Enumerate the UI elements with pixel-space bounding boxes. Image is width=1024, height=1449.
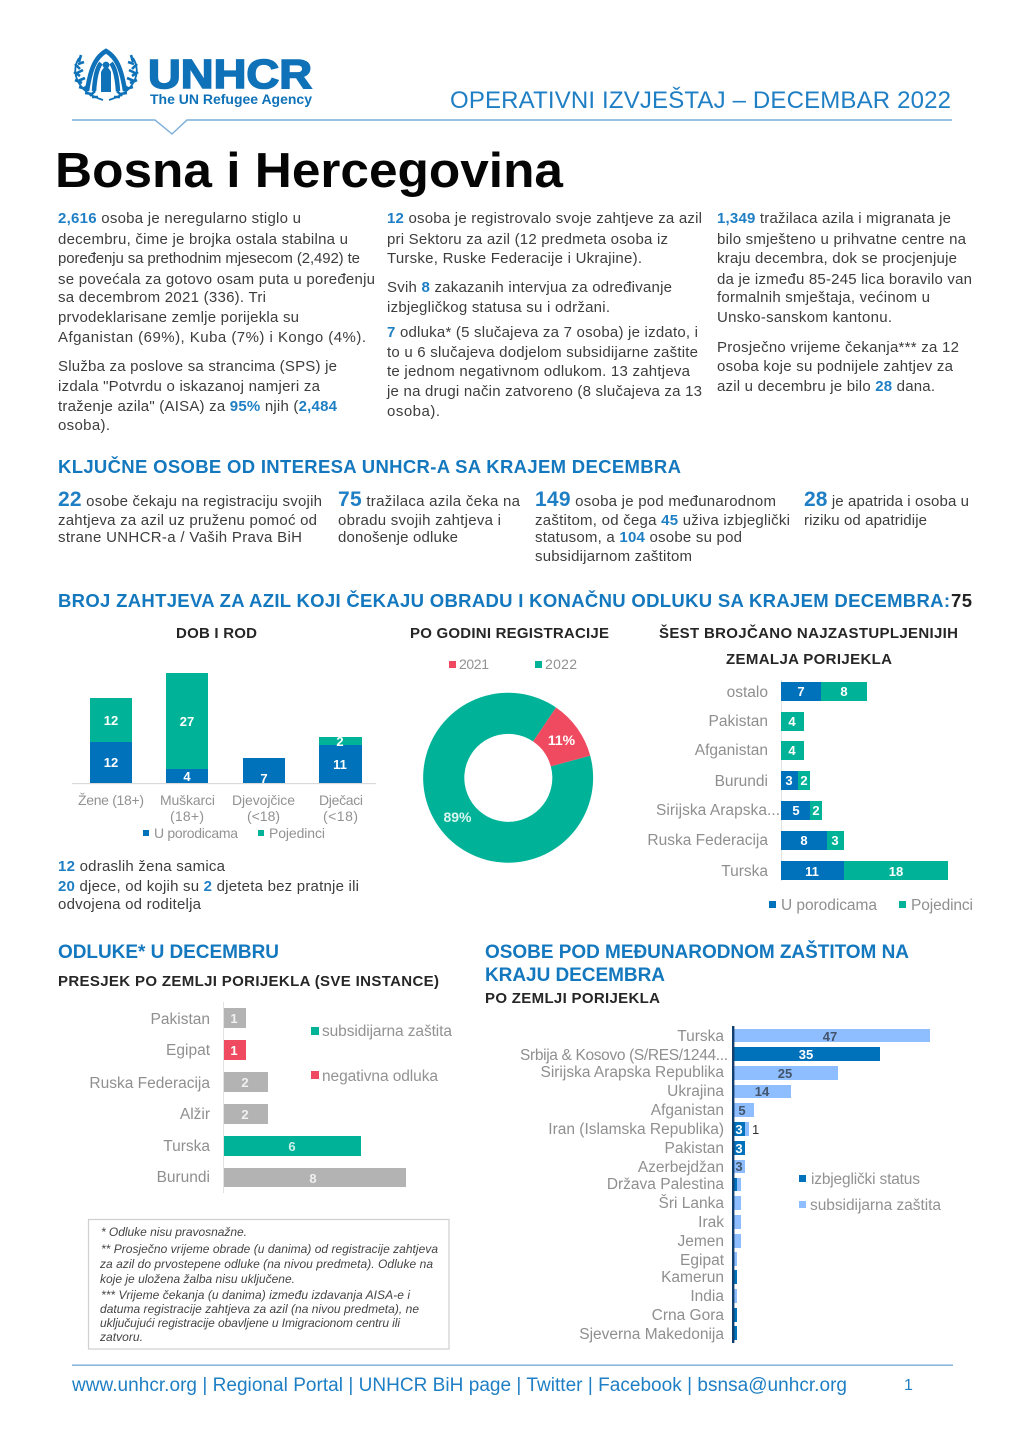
chart heading: PO GODINI REGISTRACIJE — [410, 625, 609, 642]
text block: women and children: odvojena od roditelja — [58, 896, 202, 913]
heading: key persons: KLJUČNE OSOBE OD INTERESA UNHCR-A SA KRAJEM DECEMBRA — [58, 456, 681, 477]
logo wordmark: UNHCR — [148, 51, 312, 97]
key figure: 75 — [338, 488, 521, 546]
chart: top six countries of origin: 3 — [785, 773, 793, 788]
logo tagline: The UN Refugee Agency — [150, 92, 313, 107]
chart: protection by country of origin: Turska — [677, 1028, 724, 1045]
legend: 2021 — [459, 656, 489, 672]
chart: by year of registration — [410, 625, 609, 863]
chart: protection by country of origin: Iran (Islamska Republika) — [548, 1121, 724, 1138]
chart: protection by country of origin: 3 — [735, 1141, 743, 1156]
chart: age and gender: 12 — [104, 713, 118, 728]
text block: women and children — [58, 858, 359, 913]
chart: age and gender: (<18) — [323, 808, 358, 824]
chart: decisions by country of origin: Turska — [163, 1138, 210, 1155]
heading: decisions: ODLUKE* U DECEMBRU — [58, 942, 279, 963]
text block: women and children: 20 djece, od kojih su 2 djeteta bez pratnje ili — [58, 878, 359, 895]
key figure: 149: 149 osoba je pod međunarodnom — [535, 488, 776, 511]
key figure: 22: zahtjeva za azil uz pruženu pomoć od — [58, 512, 317, 529]
key figure: 28 — [804, 488, 969, 529]
chart: protection by country of origin: 3 — [735, 1159, 743, 1174]
text block: women and children: 12 odraslih žena samica — [58, 858, 226, 875]
chart: top six countries of origin: Burundi — [715, 773, 768, 790]
chart: protection by country of origin: 14 — [755, 1084, 770, 1099]
chart: protection by country of origin: 35 — [799, 1047, 813, 1062]
legend: subsidijarna zaštita — [322, 1023, 452, 1040]
chart: protection by country of origin: Pakistan — [665, 1140, 724, 1157]
legend: Pojedinci — [269, 825, 325, 841]
chart: age and gender: 12 — [104, 755, 118, 770]
notes box: za azil do prvostepene odluke (na nivou predmeta). Odluke na — [99, 1257, 433, 1271]
chart: protection by country of origin: Crna Gora — [652, 1307, 724, 1324]
key figure: 75: 75 tražilaca azila čeka na — [338, 488, 521, 511]
icon: UNHCR emblem — [74, 51, 138, 100]
heading: persons under international protection — [485, 941, 909, 986]
chart: protection by country of origin: Srbija & Kosovo (S/RES/1244... — [520, 1047, 728, 1064]
notes box: uključujući registracije obavljene u Imigracionom centru ili — [100, 1316, 400, 1330]
chart: age and gender: (<18) — [247, 808, 280, 824]
key figure: 22: strane UNHCR-a / Vaših Prava BiH — [58, 529, 302, 546]
text block: accommodation: bilo smješteno u prihvatne centre na — [717, 231, 967, 248]
chart: top six countries of origin: 7 — [797, 684, 805, 699]
key figure: 22: 22 osobe čekaju na registraciju svojih — [58, 488, 322, 511]
legend — [799, 1171, 941, 1214]
chart: top six countries of origin: 8 — [840, 684, 848, 699]
heading: pending applications: BROJ ZAHTJEVA ZA AZIL KOJI ČEKAJU OBRADU I KONAČNU ODLUKU SA KRAJEM DECEMBRA: — [58, 590, 950, 611]
text block: registration: osoba). — [387, 403, 440, 420]
chart: top six countries of origin: 2 — [812, 803, 820, 818]
text block: registration: 12 osoba je registrovalo svoje zahtjeve za azil — [387, 210, 702, 227]
chart: age and gender: 4 — [183, 769, 191, 784]
text block: registration: to u 6 slučajeva dodjelom subsidijarne zaštite — [387, 344, 698, 361]
key figure: 149: statusom, a 104 osobe su pod — [535, 529, 742, 546]
text block: accommodation: da je između 85-245 lica boravilo van — [717, 271, 972, 288]
chart: decisions by country of origin: Ruska Federacija — [89, 1075, 210, 1092]
chart: decisions by country of origin: Pakistan — [151, 1011, 210, 1028]
text block: arrivals — [58, 210, 375, 434]
logo: UNHCR — [74, 51, 313, 107]
key figure: 28: riziku od apatridije — [804, 512, 927, 529]
chart: protection by country of origin: 1 — [752, 1122, 759, 1137]
text block: arrivals: traženje azila" (AISA) za 95% njih (2,484 — [58, 398, 338, 415]
chart: decisions by country of origin: 1 — [230, 1043, 238, 1058]
chart: age and gender: Muškarci — [160, 792, 215, 808]
page number: 1 — [904, 1377, 913, 1394]
chart: decisions by country of origin: Egipat — [166, 1042, 211, 1059]
legend — [769, 897, 973, 914]
chart: age and gender — [72, 625, 376, 841]
footer links: www.unhcr.org | Regional Portal | UNHCR BiH page | Twitter | Facebook | bsnsa@unhcr.org — [71, 1375, 847, 1396]
key figure: 149 — [535, 488, 790, 565]
chart: top six countries of origin: 4 — [788, 743, 796, 758]
key figure: 75: donošenje odluke — [338, 529, 458, 546]
chart: decisions by country of origin: Alžir — [180, 1106, 210, 1123]
text block: registration: te jednom negativnom odlukom. 13 zahtjeva — [387, 363, 691, 380]
legend: U porodicama — [781, 897, 877, 914]
key figure: 149: subsidijarnom zaštitom — [535, 548, 692, 565]
chart: protection by country of origin: 5 — [738, 1103, 746, 1118]
text block: arrivals: Afganistan (69%), Kuba (7%) i Kongo (4%). — [58, 329, 366, 346]
chart: top six countries of origin: 2 — [800, 773, 808, 788]
text block: arrivals: 2,616 osoba je neregularno stiglo u — [58, 210, 301, 227]
text block: registration: Svih 8 zakazanih intervjua za određivanje — [387, 279, 672, 296]
legend: izbjeglički status — [811, 1171, 920, 1188]
chart: protection by country of origin: Irak — [698, 1214, 724, 1231]
text block: arrivals: osoba). — [58, 417, 110, 434]
chart: top six countries of origin: Afganistan — [695, 742, 768, 759]
chart: protection by country of origin: 3 — [735, 1122, 743, 1137]
text block: arrivals: sa decembrom 2021 (336). Tri — [58, 289, 266, 306]
text block: registration: izbjegličkog statusa su i održani. — [387, 299, 610, 316]
chart: decisions by country of origin: 8 — [309, 1171, 317, 1186]
chart: protection by country of origin: Jemen — [677, 1233, 724, 1250]
chart: top six countries of origin: 11 — [805, 864, 819, 879]
chart: age and gender: 11 — [333, 757, 347, 772]
chart: age and gender: 7 — [260, 771, 268, 786]
chart: protection by country of origin: Sirijska Arapska Republika — [540, 1064, 724, 1081]
legend: negativna odluka — [322, 1068, 438, 1085]
text block: accommodation: Prosječno vrijeme čekanja*** za 12 — [717, 339, 959, 356]
chart: age and gender: (18+) — [170, 808, 204, 824]
text block: arrivals: izdala "Potvrdu o iskazanoj namjeri za — [58, 378, 321, 395]
chart: decisions by country of origin: 2 — [241, 1075, 249, 1090]
chart: protection by country of origin: 47 — [823, 1029, 837, 1044]
text block: accommodation: 1,349 tražilaca azila i migranata je — [717, 210, 951, 227]
chart: protection by country of origin: Ukrajina — [667, 1083, 724, 1100]
subheading: by country of origin: PO ZEMLJI PORIJEKLA — [485, 990, 660, 1007]
text block: arrivals: prvodeklarisane zemlje porijekla su — [58, 309, 299, 326]
legend — [143, 825, 325, 841]
legend: 2022 — [545, 656, 577, 672]
key figure: 28: 28 je apatrida i osoba u — [804, 488, 969, 511]
legend: U porodicama — [154, 825, 238, 841]
chart: top six countries of origin: 5 — [792, 803, 800, 818]
chart: protection by country of origin: Šri Lanka — [659, 1195, 724, 1212]
subheading: decisions by country: PRESJEK PO ZEMLJI PORIJEKLA (SVE INSTANCE) — [58, 973, 439, 990]
text block: arrivals: Služba za poslove sa strancima (SPS) je — [58, 358, 337, 375]
chart: decisions by country of origin: Burundi — [157, 1169, 210, 1186]
notes box: datuma registracije zahtjeva za azil (na nivou predmeta), ne — [100, 1302, 419, 1316]
chart: protection by country of origin: Država Palestina — [607, 1176, 724, 1193]
notes box: ** Prosječno vrijeme obrade (u danima) od registracije zahtjeva — [101, 1242, 438, 1256]
notes box: koje je uložena žalba nisu uključene. — [100, 1272, 295, 1286]
chart: top six countries of origin: Sirijska Arapska... — [656, 802, 780, 819]
key figure: 149: zaštitom, od čega 45 uživa izbjeglički — [535, 512, 790, 529]
chart: age and gender: Dječaci — [319, 792, 363, 808]
chart: top six countries of origin: Turska — [721, 863, 768, 880]
text block: accommodation: kraju decembra, dok se procjenjuje — [717, 250, 957, 267]
report label: OPERATIVNI IZVJEŠTAJ – DECEMBAR 2022 — [450, 86, 951, 114]
notes box: * Odluke nisu pravosnažne. — [101, 1225, 247, 1239]
legend: Pojedinci — [911, 897, 973, 914]
chart: top six countries of origin: 3 — [831, 833, 839, 848]
chart: age and gender: Djevojčice — [232, 792, 295, 808]
title: Bosna i Hercegovina — [55, 144, 564, 198]
key figure: 75: obradu svojih zahtjeva i — [338, 512, 501, 529]
chart: decisions by country of origin — [89, 1002, 452, 1193]
text block: arrivals: decembru, čime je brojka ostala stabilna u — [58, 231, 348, 248]
text block: accommodation: azil u decembru je bilo 28 dana. — [717, 378, 935, 395]
chart: decisions by country of origin: 2 — [241, 1107, 249, 1122]
chart: protection by country of origin: India — [690, 1288, 724, 1305]
chart: top six countries of origin: ostalo — [727, 684, 768, 701]
chart: protection by country of origin: Sjeverna Makedonija — [579, 1326, 724, 1343]
text block: registration: pri Sektoru za azil (12 predmeta osoba iz — [387, 231, 668, 248]
key figure: 22 — [58, 488, 322, 546]
donut: 11% — [548, 732, 576, 748]
chart: age and gender: Žene (18+) — [78, 792, 144, 808]
chart: age and gender: 2 — [336, 734, 344, 749]
chart: top six countries of origin: Ruska Federacija — [647, 832, 768, 849]
text block: accommodation: osoba koje su podnijele zahtjev za — [717, 358, 954, 375]
text block: registration — [386, 210, 702, 420]
legend — [311, 1023, 452, 1085]
chart: age and gender: 27 — [180, 714, 194, 729]
chart: decisions by country of origin: 6 — [288, 1139, 296, 1154]
chart: top six countries of origin: 8 — [800, 833, 808, 848]
chart: top six countries of origin: Pakistan — [709, 713, 768, 730]
legend: subsidijarna zaštita — [810, 1197, 941, 1214]
chart heading: ZEMALJA PORIJEKLA — [726, 651, 892, 668]
text block: accommodation: formalnih smještaja, većinom u — [717, 289, 930, 306]
chart: protection by country of origin: Afganistan — [651, 1102, 724, 1119]
notes box: *** Vrijeme čekanja (u danima) između izdavanja AISA-e i — [101, 1288, 410, 1302]
chart: protection by country of origin: Azerbejdžan — [638, 1159, 724, 1176]
heading: persons under international protection: OSOBE POD MEĐUNARODNOM ZAŠTITOM NA — [485, 941, 909, 963]
legend — [449, 656, 577, 672]
chart: top six countries of origin — [647, 624, 973, 914]
text block: registration: Turske, Ruske Federacije i Ukrajine). — [387, 250, 642, 267]
text block: registration: je na drugi način zatvoreno (8 slučajeva za 13 — [386, 383, 702, 400]
notes box — [88, 1220, 449, 1349]
text block: registration: 7 odluka* (5 slučajeva za 7 osoba) je izdato, i — [387, 324, 698, 341]
chart: protection by country of origin: Egipat — [680, 1252, 725, 1269]
chart: protection by country of origin: Kamerun — [661, 1269, 724, 1286]
heading: pending applications: 75 — [951, 590, 972, 611]
text block: accommodation — [717, 210, 972, 395]
chart: decisions by country of origin: 1 — [230, 1011, 238, 1026]
notes box: zatvoru. — [99, 1330, 143, 1344]
heading: persons under international protection: KRAJU DECEMBRA — [485, 965, 665, 986]
text block: accommodation: Unsko-sanskom kantonu. — [717, 309, 892, 326]
chart heading — [659, 624, 958, 668]
chart: protection by country of origin — [520, 1026, 941, 1343]
text block: arrivals: poređenju sa prethodnim mjesecom (2,492) te — [58, 250, 360, 267]
chart heading: ŠEST BROJČANO NAJZASTUPLJENIJIH — [659, 624, 958, 642]
text block: arrivals: se povećala za gotovo osam puta u poređenju — [58, 271, 375, 288]
chart heading: DOB I ROD — [176, 625, 257, 642]
donut — [423, 693, 593, 863]
chart: protection by country of origin: 25 — [778, 1066, 792, 1081]
chart: top six countries of origin: 18 — [889, 864, 903, 879]
donut: 89% — [443, 809, 472, 825]
chart: top six countries of origin: 4 — [788, 714, 796, 729]
